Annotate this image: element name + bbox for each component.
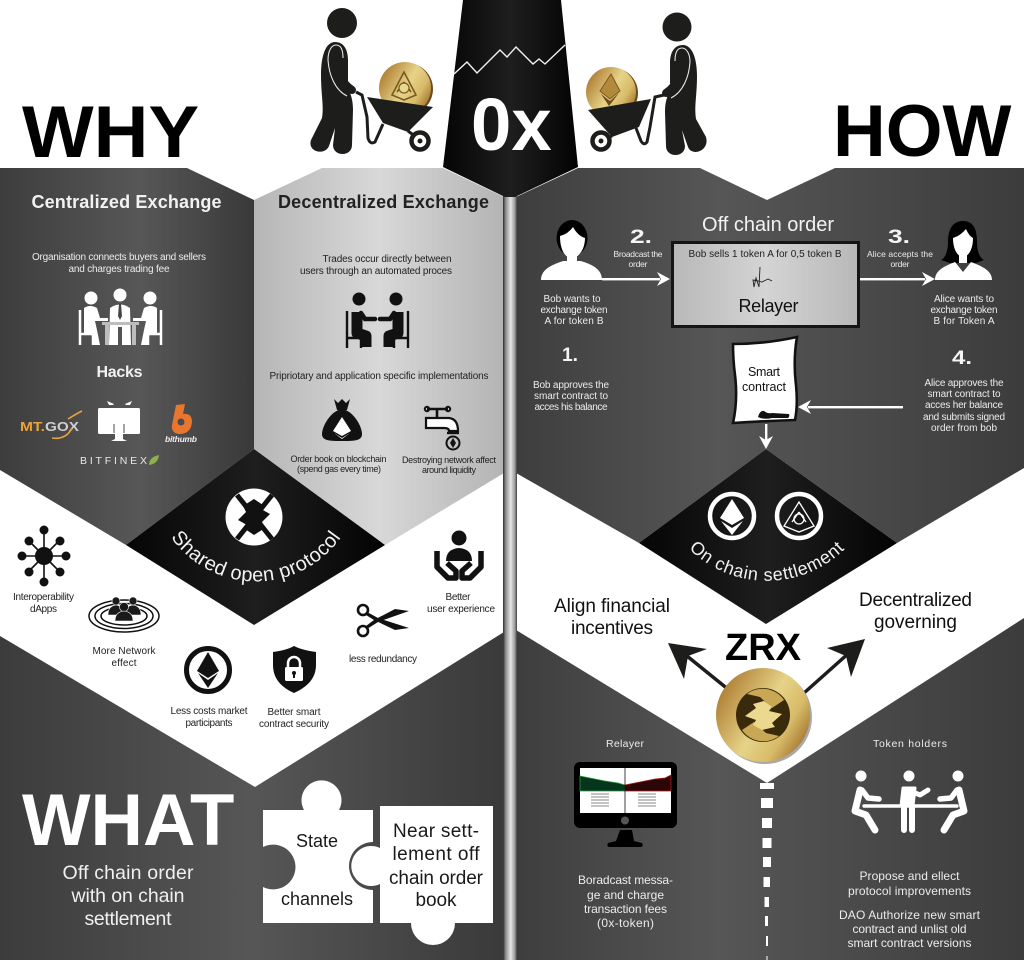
heading: hacks: Hacks <box>96 364 143 381</box>
text: better user experience <box>427 592 495 615</box>
text: Bob approves: acces his balance <box>534 402 608 413</box>
box: relayer: Relayer <box>738 296 798 316</box>
box: relayer <box>672 242 858 326</box>
text: what description: settlement <box>84 908 172 930</box>
text: less costs: participants <box>186 718 232 729</box>
text: more network effect: More Network <box>92 646 156 657</box>
heading: WHAT: WHAT <box>22 780 234 861</box>
label: token holders: Token holders <box>873 738 947 750</box>
text: Alice wants to exchange <box>930 294 998 327</box>
text: less costs <box>170 706 248 729</box>
label: relayer: Relayer <box>606 738 644 750</box>
text: relayer description: (0x-token) <box>597 916 654 930</box>
text: interoperability dapps: dApps <box>30 604 57 615</box>
text: Alice approves: order from bob <box>931 423 997 434</box>
signature blob <box>758 411 789 419</box>
text: Bob wants to exchange: A for token B <box>544 316 604 327</box>
text: align financial incentives: incentives <box>571 618 653 639</box>
text: less redundancy: less redundancy <box>349 654 417 665</box>
label: on chain settlement: On chain settlement <box>692 542 845 581</box>
heading: decentralized exchange: Decentralized Exchange <box>278 192 489 212</box>
document: smart contract <box>733 337 797 423</box>
text: better smart contract security: contract security <box>259 719 329 730</box>
panel: decentralized exchange <box>254 168 504 545</box>
black 0x banner <box>443 0 578 197</box>
icon: ZRX gold coin <box>716 668 812 764</box>
text: state channels: channels <box>281 889 353 909</box>
icon: ethereum coin black <box>186 648 230 692</box>
document: smart contract: contract <box>742 380 787 394</box>
heading: off chain order: Off chain order <box>702 214 834 236</box>
text: Alice approves: acces her balance <box>925 400 1003 411</box>
text: token holders description: DAO Authorize new smart <box>839 908 981 922</box>
text: relayer description: Boradcast messa- <box>578 873 673 887</box>
text: token holders description: Propose and ellect <box>860 869 960 883</box>
text: near settlement: chain order <box>389 868 484 889</box>
text: what description: with on chain <box>70 885 184 907</box>
text: trades description <box>300 254 452 277</box>
coin <box>586 67 638 118</box>
arrow: to align financial <box>668 643 729 690</box>
logo: bithumb: bithumb <box>165 434 197 444</box>
step label 3: 3. <box>888 227 910 248</box>
text: relayer description <box>578 873 673 930</box>
text: order book on blockchain: Order book on blockchain <box>290 454 386 464</box>
heading: ZRX: ZRX <box>725 627 802 669</box>
text: more network effect: effect <box>112 658 137 669</box>
logo: bithumb <box>165 404 197 444</box>
text: token holders description <box>839 869 981 950</box>
text: near settlement: lement off <box>392 844 480 865</box>
icon: money bag with ether <box>322 399 362 441</box>
text: destroying network: around liquidity <box>422 465 476 475</box>
text: order book on blockchain: (spend gas every time) <box>297 464 381 474</box>
icon: monitor with order book <box>574 762 677 847</box>
arrow: Bob to relayer <box>602 272 670 286</box>
logo: Mt.Gox <box>20 411 82 438</box>
arrow: contract to settlement <box>759 424 773 449</box>
box: relayer: Bob sells 1 token A for 0,5 token B <box>688 249 842 260</box>
text: better user experience: user experience <box>427 604 495 615</box>
text: organisation description: Organisation connects buyers and sellers <box>32 252 206 263</box>
icon: interoperability hub <box>18 526 70 586</box>
text: broadcast the order: Broadcast the <box>614 249 663 259</box>
logo: bitfinex: BITFINEX <box>80 455 147 467</box>
puzzle piece: state channels <box>263 780 373 923</box>
text: align financial incentives <box>554 596 670 639</box>
icon: three people meeting <box>80 288 161 345</box>
panel: what section background <box>0 632 504 960</box>
text: decentralized governing: governing <box>874 612 957 633</box>
step label 1: 1. <box>562 345 578 366</box>
text: interoperability dapps <box>13 592 74 615</box>
text: Bob wants to exchange: exchange token <box>540 305 608 316</box>
icon: ethereum ring <box>710 494 754 538</box>
icon: Alice <box>935 221 992 280</box>
text: better smart contract security <box>259 707 329 730</box>
icon: hacked monitor <box>98 401 140 441</box>
logo: Mt.Gox: GOX <box>45 419 79 434</box>
text: Alice approves: smart contract to <box>928 389 1001 400</box>
text: destroying network: Destroying network affect <box>402 455 496 465</box>
text: near settlement: Near sett- <box>393 821 479 842</box>
text: token holders description: contract and unlist old <box>852 922 966 936</box>
arrow: relayer to Alice <box>860 272 935 286</box>
text: decentralized governing: Decentralized <box>859 590 972 611</box>
text: alice accepts the order: Alice accepts the <box>867 249 933 259</box>
text: Alice wants to exchange: Alice wants to <box>934 294 994 305</box>
text: broadcast the order: order <box>628 259 648 269</box>
text: broadcast the order <box>614 249 663 269</box>
text: token holders description: protocol improvements <box>848 884 971 898</box>
chart line <box>454 45 565 74</box>
figure: person pushing wheelbarrow with ether coin <box>586 12 707 155</box>
text: relayer description: transaction fees <box>584 902 667 916</box>
text: interoperability dapps: Interoperability <box>13 592 74 603</box>
text: better smart contract security: Better smart <box>268 707 321 718</box>
diamond: on chain settlement <box>639 449 897 624</box>
document: smart contract: Smart <box>748 365 781 379</box>
panel: centralized exchange <box>0 168 254 545</box>
icon: person held in hands <box>437 530 481 578</box>
heading: WHY: WHY <box>22 91 199 173</box>
coin <box>379 62 433 115</box>
icon: token holders at table <box>855 770 964 830</box>
label: shared open protocol: Shared open protocol <box>172 530 340 585</box>
arrow: to decentralized governing <box>804 639 865 693</box>
text: what description: Off chain order <box>62 862 194 884</box>
text: align financial incentives: Align financial <box>554 596 670 617</box>
text: less costs: Less costs market <box>170 706 248 717</box>
icon: augur ring <box>777 494 821 538</box>
text: trades description: Trades occur directly between <box>322 254 452 265</box>
center metal bar <box>503 190 517 960</box>
text: better user experience: Better <box>446 592 471 603</box>
panel: how section background <box>516 168 1024 543</box>
text: Bob approves: Bob approves the <box>533 380 609 391</box>
text: relayer description: ge and charge <box>587 888 664 902</box>
step label 2: 2. <box>630 227 652 248</box>
text: state channels <box>281 831 353 909</box>
text: what description <box>62 862 194 930</box>
text: Bob approves: smart contract to <box>534 391 608 402</box>
arrow: Alice to smart contract <box>798 400 903 414</box>
icon: faucet with coin <box>425 407 460 450</box>
icon: Bob <box>541 220 602 280</box>
text: near settlement: book <box>416 890 457 911</box>
text: alice accepts the order: order <box>890 259 910 269</box>
dashed center road <box>760 783 774 960</box>
text: token holders description: smart contract versions <box>848 936 972 950</box>
heading: HOW: HOW <box>833 91 1012 172</box>
text: decentralized governing <box>859 590 972 633</box>
icon: scissors <box>358 605 409 636</box>
text: order book on blockchain <box>290 454 386 474</box>
text: Alice wants to exchange: exchange token <box>930 305 998 316</box>
figure: person pushing wheelbarrow with augur coin <box>310 8 433 154</box>
icon: network rings with people <box>89 597 159 632</box>
text: more network effect <box>92 646 156 669</box>
text: alice accepts the order <box>867 249 933 269</box>
icon: two people dealing <box>347 292 408 348</box>
panel: token section background <box>516 618 1024 960</box>
heading: centralized exchange: Centralized Exchange <box>32 192 222 212</box>
step label 4: 4. <box>952 348 972 369</box>
text: organisation description: and charges trading fee <box>68 264 170 275</box>
icon: 0x logo <box>226 488 282 546</box>
text: Alice wants to exchange: B for Token A <box>934 316 995 327</box>
icon: shield with lock <box>273 646 316 693</box>
text: destroying network <box>402 455 496 475</box>
signature <box>753 267 772 287</box>
text: Bob wants to exchange <box>540 294 608 327</box>
text: Bob approves <box>533 380 609 413</box>
text: Alice approves <box>923 378 1005 434</box>
text: Alice approves: Alice approves the <box>924 378 1004 389</box>
text: pripriotary: Pripriotary and application specific implementations <box>270 371 488 382</box>
text: trades description: users through an automated proces <box>300 266 452 277</box>
puzzle piece: near settlement <box>351 806 493 945</box>
text: Alice approves: and submits signed <box>923 412 1005 423</box>
label: 0x: 0x <box>471 83 552 166</box>
text: organisation description <box>32 252 206 275</box>
logo: Mt.Gox: MT. <box>20 419 45 434</box>
text: near settlement <box>389 821 484 911</box>
text: state channels: State <box>296 831 338 851</box>
text: Bob wants to exchange: Bob wants to <box>544 294 601 305</box>
diamond: shared open protocol <box>126 449 385 625</box>
